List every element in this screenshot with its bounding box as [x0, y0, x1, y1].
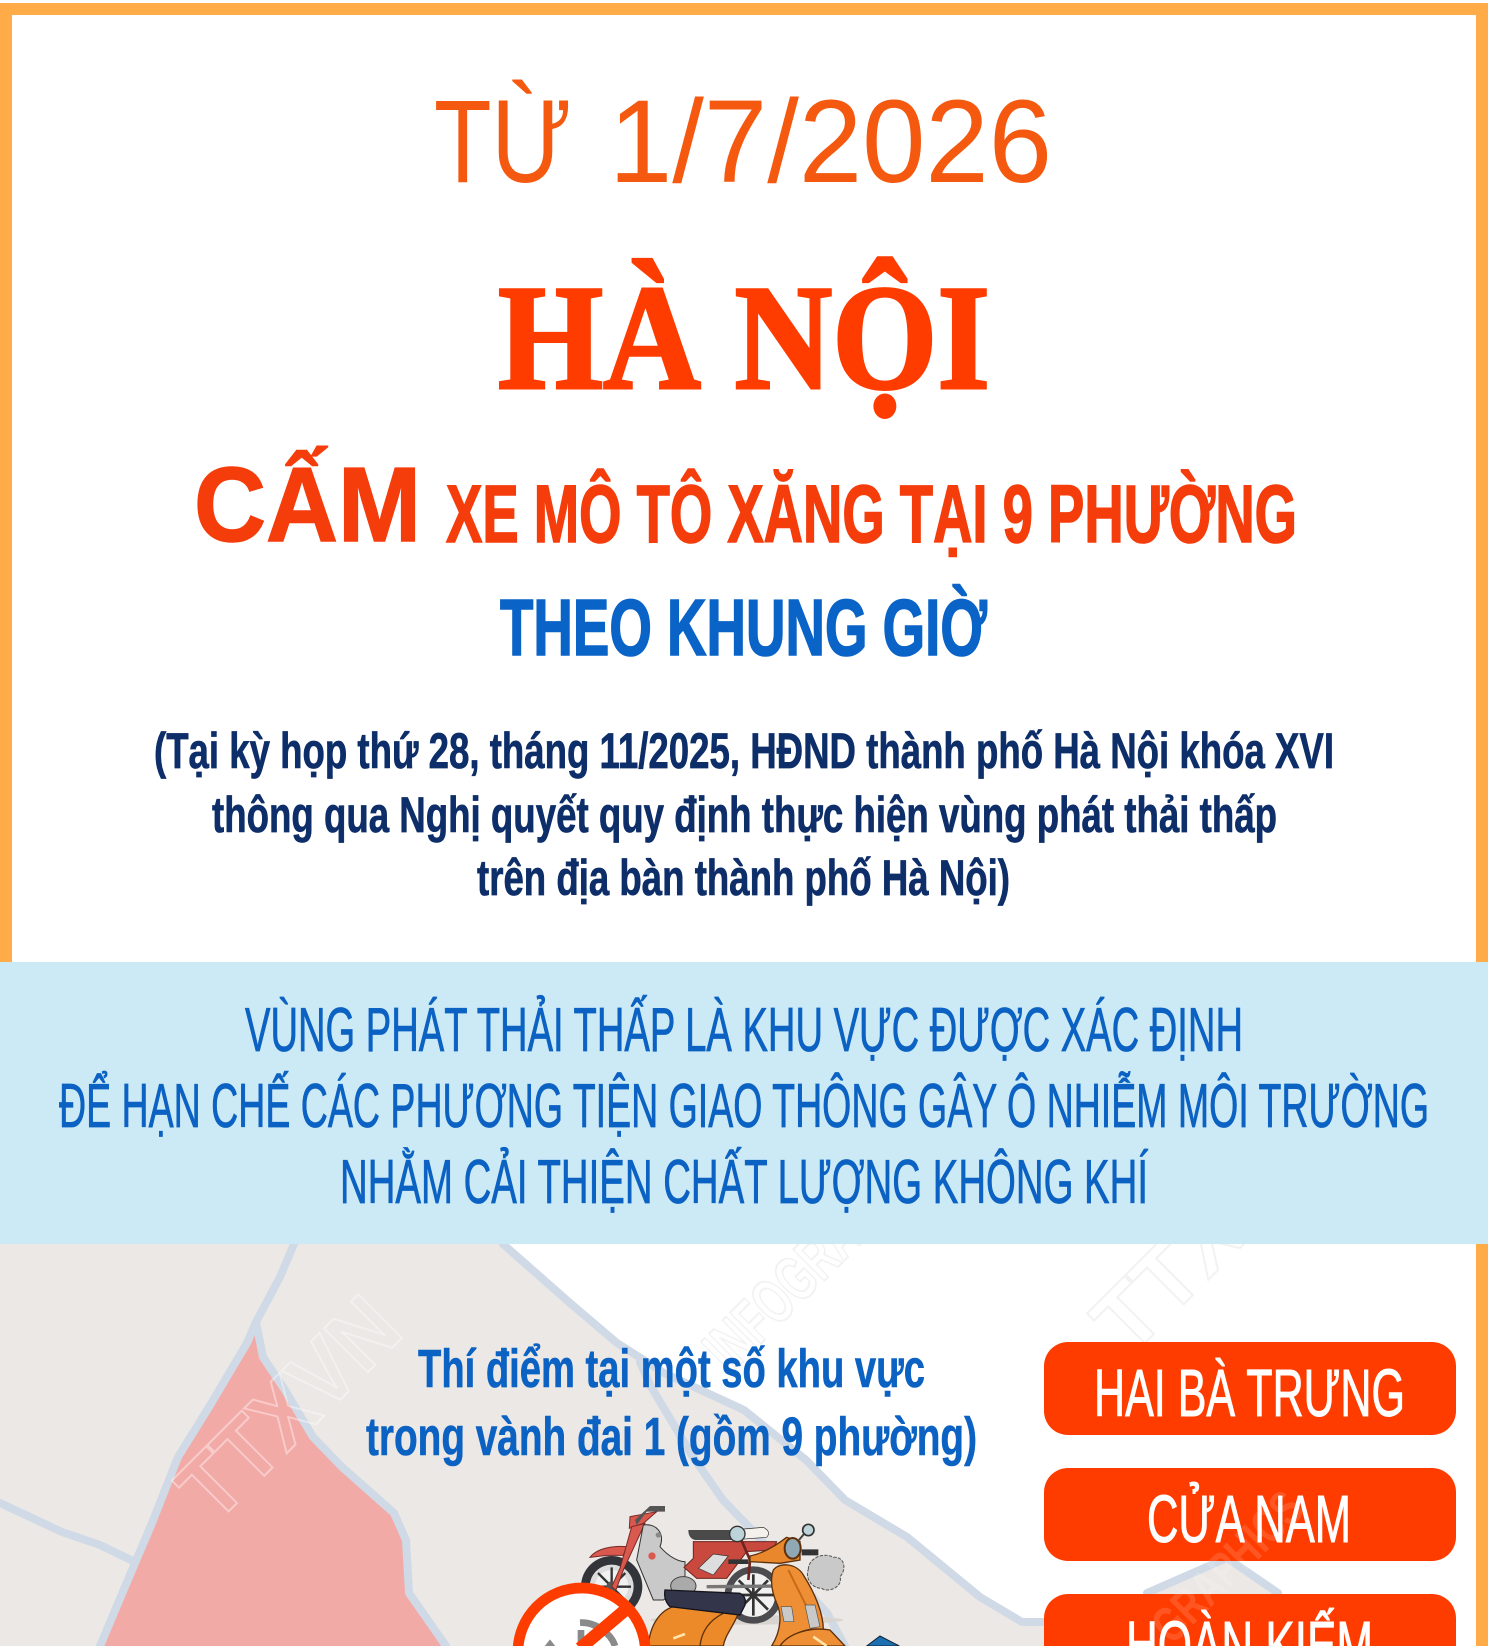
- title: ban headline: [194, 445, 1297, 564]
- red motorbike: [581, 1506, 843, 1625]
- blue object: [867, 1636, 899, 1646]
- title: ban headline: CẤM: [194, 445, 421, 564]
- title: by time frame: THEO KHUNG GIỜ: [500, 583, 988, 672]
- ward pill: Cửa Nam: [1044, 1468, 1456, 1561]
- title: Hà Nội: HÀ NỘI: [498, 255, 990, 421]
- text block: legal note: trên địa bàn thành phố Hà Nội): [477, 850, 1010, 906]
- title: date: 1/7/2026: [609, 76, 1052, 208]
- ward pill: Cửa Nam: CỬA NAM: [1147, 1482, 1351, 1557]
- text block: legal note: [154, 723, 1334, 906]
- text block: pilot area: [366, 1339, 977, 1467]
- title: date: TỪ: [434, 76, 572, 208]
- ward pill: Hoàn Kiếm: [1044, 1594, 1456, 1646]
- watermark: TTX: [1073, 1181, 1264, 1372]
- watermark: TTXVN: [158, 1278, 420, 1539]
- map: highlighted low-emission zone: [100, 1332, 446, 1646]
- icon: motorbikes with no-entry sign: [518, 1506, 899, 1646]
- map background: [0, 1244, 1278, 1646]
- text block: pilot area: trong vành đai 1 (gồm 9 phường): [366, 1407, 977, 1467]
- orange scooter: [648, 1524, 845, 1646]
- map: roads: [0, 1244, 1278, 1646]
- exhaust smoke: [807, 1555, 844, 1590]
- no-entry sign: [518, 1588, 645, 1646]
- title: date: [434, 76, 1052, 208]
- text block: pilot area: Thí điểm tại một số khu vực: [418, 1339, 925, 1399]
- ward pill: Hai Bà Trưng: [1044, 1342, 1456, 1435]
- banner: definition of low-emission zone: [0, 962, 1488, 1244]
- watermark: INFOGRA: [689, 1200, 874, 1385]
- watermark: [158, 1181, 1264, 1539]
